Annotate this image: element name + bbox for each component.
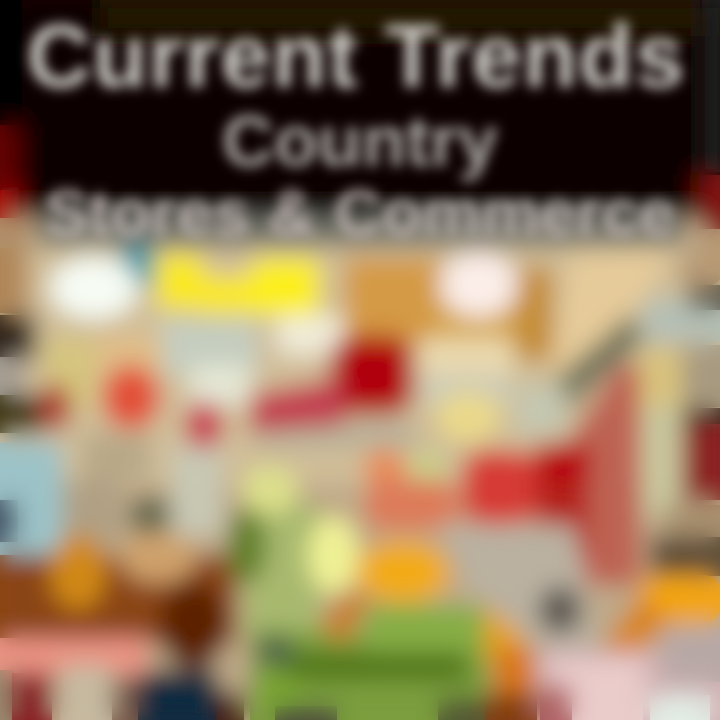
- teal and blue accents: [0, 236, 244, 720]
- title: line 3: Stores & Commerce: [45, 176, 675, 250]
- dark title banner: [0, 0, 720, 248]
- title: line 1: Current Trends: [26, 7, 686, 107]
- red produce: [39, 335, 640, 585]
- title: line 2: Country: [222, 102, 498, 182]
- orange produce: [318, 541, 720, 720]
- left: baked goods and basket: [0, 533, 236, 720]
- right: grey and pink wrapped goods: [436, 525, 720, 720]
- yellow sign: [156, 254, 320, 316]
- store background: [0, 225, 720, 576]
- shelves: cream displays: [60, 315, 566, 545]
- pale lamps: [50, 253, 518, 319]
- centre: green vegetables: [227, 466, 490, 720]
